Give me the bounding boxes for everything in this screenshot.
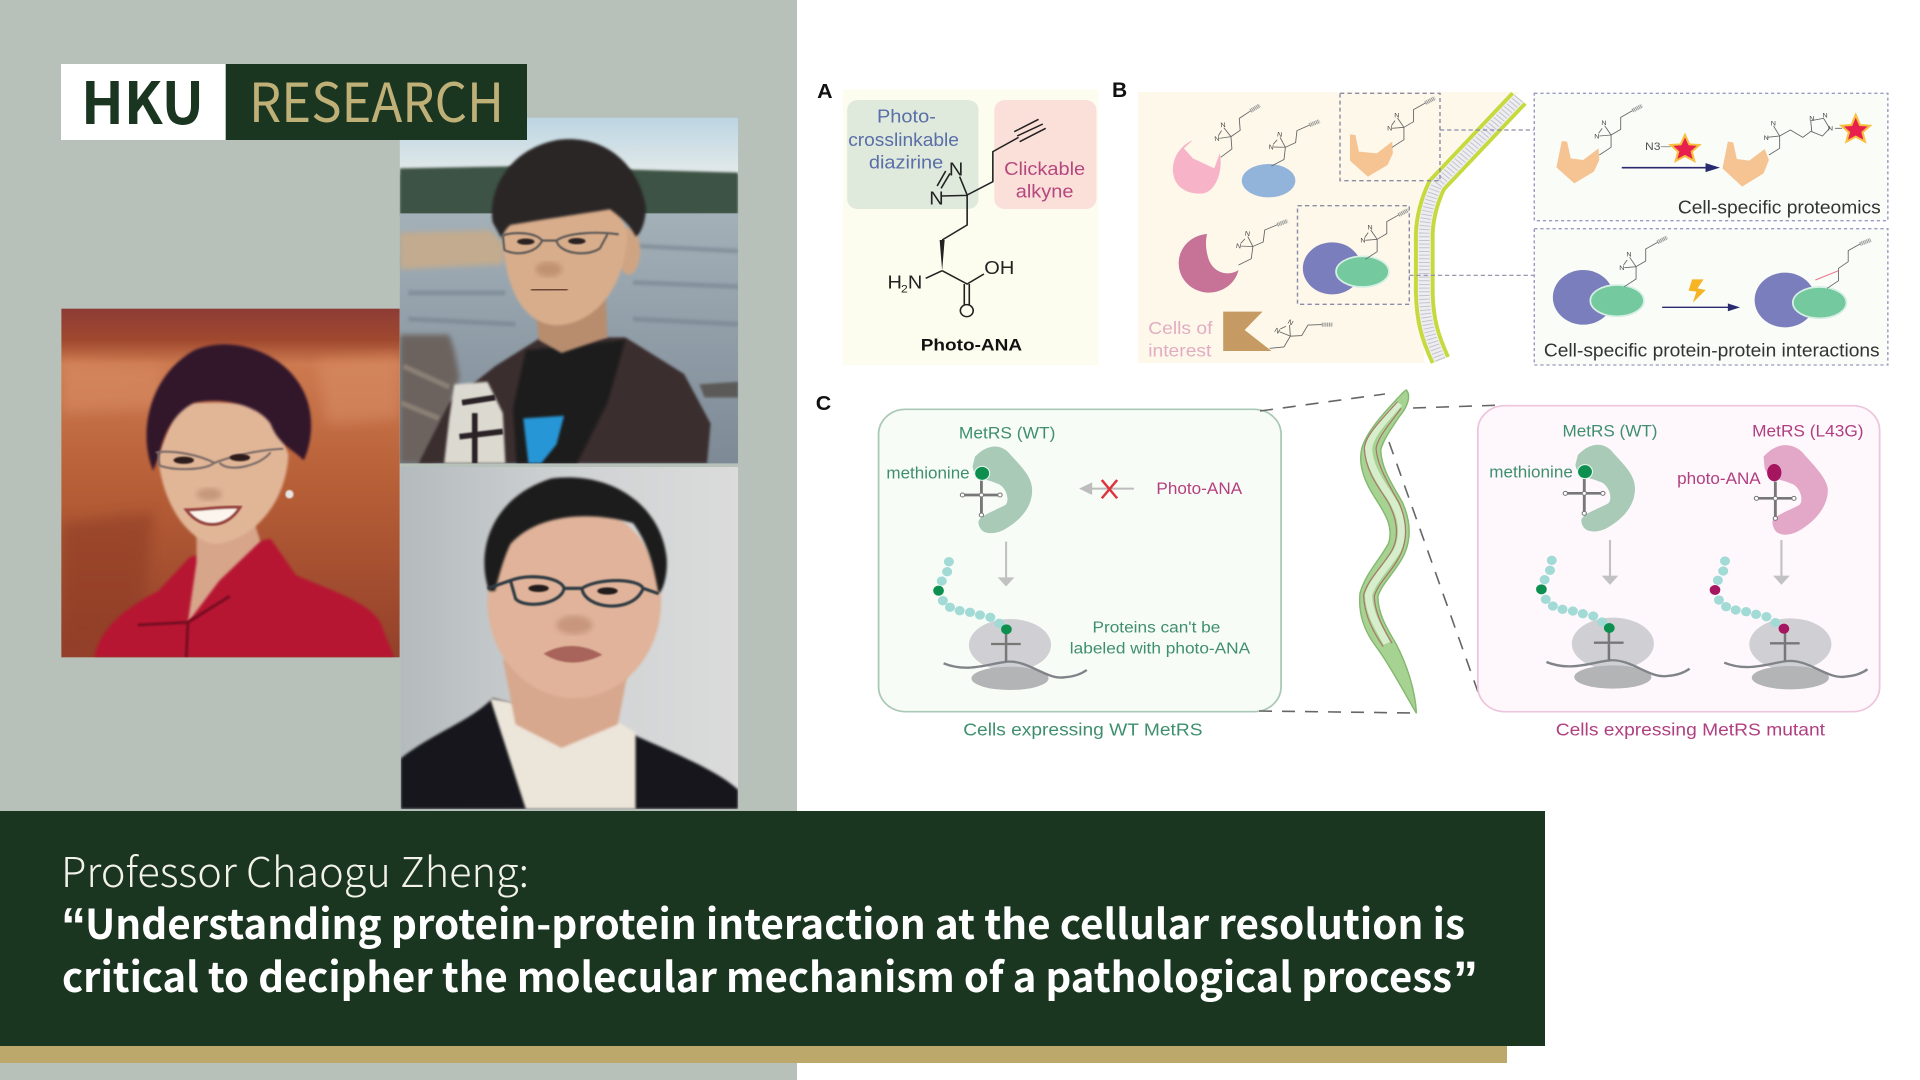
light arrow: [1662, 304, 1738, 310]
interaction label: Cell-specific protein-protein interactions: [1544, 340, 1880, 361]
complex before crosslink: N: [1626, 252, 1632, 259]
panel B: cell-specific labeling: [1112, 79, 1888, 368]
pink protein: [1173, 105, 1263, 194]
L43G enzyme with tRNA: [1754, 445, 1828, 535]
quote line 2: ”: [1453, 951, 1478, 1007]
proteins note: [1070, 620, 1251, 657]
ribosome and peptide: [933, 557, 1087, 690]
logo white tile: HKU: [81, 57, 204, 141]
protein before click: [1556, 106, 1642, 183]
diazirine highlight: Photo-: [877, 106, 936, 127]
panel C: mutant cells and worm: [1360, 390, 1880, 740]
magenta protein: N: [1236, 243, 1242, 250]
logo: HKU Research: [61, 57, 527, 141]
atom labels: N: [929, 188, 944, 209]
complex before crosslink: N: [1619, 265, 1624, 272]
box: cell-specific proteomics: [1534, 93, 1888, 221]
alkyne highlight: Clickable: [1004, 159, 1085, 180]
N3 star reagent: N3: [1645, 140, 1661, 153]
alkyne highlight: [994, 100, 1096, 209]
protein after click: N: [1828, 126, 1833, 133]
complex after crosslink: [1755, 240, 1871, 327]
pink protein: N: [1214, 136, 1220, 143]
proteomics label: Cell-specific proteomics: [1678, 197, 1881, 218]
MetRS WT label: MetRS (WT): [1562, 421, 1657, 441]
methionine label: methionine: [1489, 462, 1573, 481]
mutant ribosome and peptide: [1710, 556, 1867, 689]
protein after click: N: [1764, 135, 1769, 142]
quote line 1: Understanding protein-protein interaction at the cellular resolution is: [85, 891, 1465, 951]
protein before click: N: [1594, 134, 1599, 140]
brown protein: [1223, 303, 1333, 368]
cell proteins group: [1148, 105, 1333, 368]
dashed box: orange protein: [1340, 93, 1440, 181]
methionine label: methionine: [886, 463, 970, 483]
brown protein: N: [1273, 327, 1281, 336]
zoom connector dashes: [1259, 394, 1505, 713]
membrane: [1424, 98, 1519, 360]
mutant caption: Cells expressing MetRS mutant: [1556, 720, 1825, 740]
down arrows: [1604, 540, 1787, 583]
photo-ANA label: photo-ANA: [1677, 469, 1761, 488]
panel letter B: B: [1112, 79, 1127, 102]
logo dark tile: RESEARCH: [249, 59, 504, 138]
membrane and detail boxes: [1298, 93, 1888, 365]
blocked arrow: [1081, 480, 1134, 498]
WT caption: Cells expressing WT MetRS: [963, 720, 1203, 740]
quote banner: [0, 811, 1545, 1046]
blue protein: N: [1277, 132, 1283, 139]
protein after click: [1722, 113, 1870, 187]
panel A: photo-ANA structure: [817, 81, 1098, 365]
proteins note: Proteins can't be: [1092, 620, 1221, 636]
WT enzyme with tRNA: [1563, 445, 1635, 532]
cells of interest label: [1148, 318, 1213, 361]
dashed box: orange protein: N: [1394, 113, 1399, 119]
WT rounded box: [879, 409, 1281, 712]
blue protein: [1242, 116, 1320, 197]
panel letter A: A: [817, 81, 833, 103]
compound name: Photo-ANA: [921, 335, 1023, 355]
dashed box: protein complex: [1298, 206, 1409, 304]
gold strip: [0, 1046, 1507, 1063]
N3 star reagent: [1645, 135, 1699, 161]
atom labels: [887, 159, 1014, 296]
box: cell-specific protein-protein interactions: [1534, 229, 1888, 365]
dashed box: protein complex: N: [1360, 238, 1366, 245]
photo group: three researchers: [61, 118, 738, 809]
cells of interest label: Cells of: [1148, 318, 1213, 338]
dashed box: protein complex: N: [1367, 225, 1373, 231]
diazirine highlight: [847, 100, 979, 209]
cells of interest label: interest: [1148, 340, 1212, 361]
mutant rounded box: [1478, 406, 1880, 712]
left sage panel: [0, 0, 797, 1080]
panel letter C: C: [816, 393, 831, 415]
speaker line: Professor Chaogu Zheng:: [61, 839, 529, 899]
protein after click: N: [1809, 116, 1814, 123]
quote line 1: “: [61, 898, 86, 954]
MetRS L43G label: MetRS (L43G): [1752, 421, 1864, 441]
C. elegans worm: [1360, 390, 1416, 713]
down arrow: [1000, 542, 1012, 585]
alkyne highlight: alkyne: [1016, 181, 1074, 202]
WT ribosome and peptide: [1536, 556, 1690, 689]
panel B cell background: [1138, 92, 1519, 363]
photo: woman in red shirt: [61, 309, 400, 657]
magenta protein: N: [1244, 231, 1250, 238]
atom labels: H: [887, 272, 902, 293]
Photo-ANA label: Photo-ANA: [1156, 479, 1243, 498]
atom labels: OH: [984, 258, 1014, 279]
blue protein: N: [1268, 144, 1274, 151]
brown protein: N: [1286, 319, 1294, 327]
molecule skeleton: [926, 119, 1046, 317]
MetRS enzyme with tRNA: [960, 446, 1032, 533]
photo: man by the water: [400, 118, 738, 464]
atom labels: 2: [901, 283, 908, 296]
atom labels: N: [908, 272, 922, 293]
protein after click: N: [1822, 113, 1828, 119]
magenta protein: [1179, 215, 1288, 293]
diazirine highlight: crosslinkable: [848, 130, 959, 151]
protein before click: N: [1601, 120, 1607, 127]
atom labels: N: [949, 159, 963, 180]
proteins note: labeled with photo-ANA: [1070, 641, 1251, 657]
connector lines: [1409, 130, 1534, 275]
quote line 2: critical to decipher the molecular mechanism of a pathological process: [62, 944, 1452, 1004]
diazirine highlight: diazirine: [869, 152, 943, 173]
panel C: wild-type cells: [816, 393, 1281, 740]
pink protein: N: [1220, 122, 1226, 129]
photo: man in dark jacket: [401, 467, 738, 809]
complex before crosslink: [1553, 237, 1667, 325]
protein after click: N: [1771, 121, 1776, 127]
reaction arrow: [1622, 164, 1717, 171]
dashed box: orange protein: N: [1387, 126, 1392, 133]
icon: light bolt: [1689, 279, 1706, 303]
MetRS WT label: MetRS (WT): [959, 423, 1055, 442]
